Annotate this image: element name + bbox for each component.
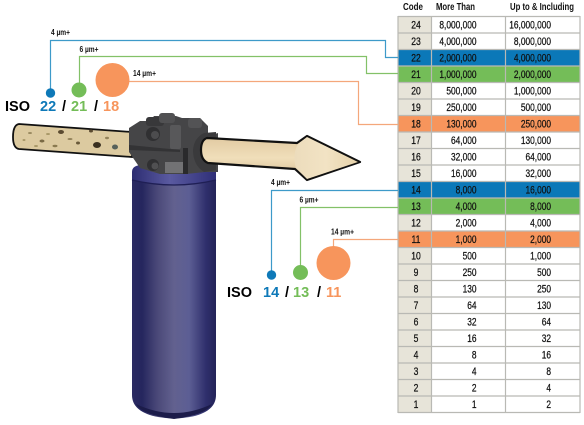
table values: 4: [546, 383, 551, 395]
label 14 micron: 14 µm+: [133, 69, 156, 78]
table values: 7: [414, 300, 418, 313]
4 micron dot: [267, 270, 276, 280]
table values: 130,000: [521, 135, 551, 148]
table values: [411, 20, 551, 412]
14 micron dot: [316, 246, 350, 280]
code column and highlighted rows: [398, 16, 580, 413]
ISO code 22/21/18: 21: [71, 99, 87, 115]
table values: 5: [414, 333, 419, 346]
table values: 21: [411, 69, 421, 82]
table values: 250: [537, 284, 551, 296]
table values: 8,000,000: [439, 20, 477, 32]
table values: 1,000,000: [439, 69, 477, 82]
4 micron dot: [46, 88, 55, 98]
ISO code 14/13/11: 13: [293, 285, 309, 301]
filter head: [129, 113, 218, 174]
table values: 18: [411, 119, 421, 131]
label 6 micron: 6 µm+: [300, 196, 319, 204]
ISO code 22/21/18: /: [94, 99, 98, 115]
label 6 micron: 6 µm+: [80, 45, 99, 54]
table values: 1: [414, 399, 418, 412]
filter canister: [132, 165, 216, 419]
table values: 12: [411, 218, 421, 230]
ISO code 14/13/11: ISO: [227, 285, 252, 301]
label 4 micron: 4 µm+: [271, 178, 290, 187]
table values: 16,000: [525, 185, 551, 197]
table values: 64,000: [451, 135, 477, 148]
table values: 1,000: [530, 251, 551, 263]
upper callout: ISO 22/21/18: [5, 28, 398, 124]
table values: 6: [414, 317, 419, 329]
6 micron dot: [72, 82, 86, 98]
table values: 250: [463, 267, 477, 280]
table values: 8,000: [456, 185, 477, 197]
table values: 130: [537, 300, 551, 313]
table values: 19: [411, 102, 421, 115]
4 micron connector: [272, 190, 398, 275]
4 micron connector: [50, 40, 398, 93]
ISO code 14/13/11: [227, 285, 341, 301]
table values: 16: [411, 152, 421, 164]
table values: 16: [542, 350, 551, 362]
table values: 2,000: [530, 234, 551, 247]
table values: 1,000,000: [514, 86, 551, 98]
table values: 32: [542, 333, 551, 346]
6 micron dot: [293, 265, 308, 280]
6 micron connector: [80, 56, 398, 84]
14 micron dot: [96, 63, 130, 97]
ISO code 14/13/11: 14: [263, 285, 279, 301]
contaminated inlet rod: [13, 124, 132, 157]
table values: 2,000,000: [439, 53, 477, 65]
14 micron connector: [129, 82, 398, 124]
ISO code 22/21/18: [5, 99, 119, 115]
table values: 22: [411, 53, 421, 65]
table values: 130,000: [446, 119, 477, 131]
table headers: Code: [403, 2, 423, 13]
table values: 10: [411, 251, 421, 263]
table values: 32: [467, 317, 476, 329]
table values: 8,000: [530, 201, 551, 214]
table values: 3: [414, 366, 419, 379]
table values: 8: [414, 284, 419, 296]
ISO code 22/21/18: 18: [103, 99, 119, 115]
table values: 16,000: [451, 168, 477, 181]
table values: 4: [472, 366, 477, 379]
6 micron connector: [300, 208, 398, 268]
table values: 20: [411, 86, 421, 98]
table values: 8: [472, 350, 476, 362]
table values: 2: [546, 399, 551, 412]
table values: 17: [411, 135, 421, 148]
table values: 13: [411, 201, 421, 214]
table headers: [403, 2, 574, 13]
ISO code 14/13/11: /: [317, 285, 321, 301]
table values: 1: [472, 399, 476, 412]
clean outlet arrow: [201, 136, 360, 180]
lower callout: ISO 14/13/11: [227, 178, 398, 301]
table values: 1,000: [456, 234, 477, 247]
table values: 130: [463, 284, 477, 296]
table values: 64,000: [525, 152, 551, 164]
table values: 8: [546, 366, 551, 379]
table values: 16: [467, 333, 476, 346]
table values: 4: [414, 350, 419, 362]
table values: 32,000: [451, 152, 477, 164]
table values: 64: [467, 300, 477, 313]
table values: 14: [411, 185, 421, 197]
table values: 2: [472, 383, 476, 395]
table values: 2,000,000: [514, 69, 551, 82]
table values: 11: [412, 234, 420, 247]
table: [398, 2, 580, 413]
table values: 250,000: [521, 119, 551, 131]
table values: 2: [414, 383, 418, 395]
ISO code 22/21/18: 22: [40, 99, 56, 115]
table values: 23: [411, 36, 421, 49]
table values: 4,000,000: [514, 53, 551, 65]
table grid: [398, 16, 580, 413]
table values: 64: [542, 317, 551, 329]
table values: 500,000: [446, 86, 477, 98]
ISO code 14/13/11: /: [285, 285, 289, 301]
table values: 9: [414, 267, 419, 280]
table values: 24: [411, 20, 421, 32]
ISO code 22/21/18: /: [62, 99, 66, 115]
table values: 2,000: [456, 218, 477, 230]
table values: 8,000,000: [514, 36, 551, 49]
ISO code 22/21/18: ISO: [5, 99, 30, 115]
table values: 250,000: [446, 102, 477, 115]
table values: 15: [411, 168, 421, 181]
table values: 16,000,000: [509, 20, 551, 32]
ISO code 14/13/11: 11: [326, 285, 341, 301]
table values: 500: [537, 267, 551, 280]
label 4 micron: 4 µm+: [51, 28, 70, 37]
label 14 micron: 14 µm+: [331, 228, 354, 236]
table values: 500,000: [521, 102, 551, 115]
table values: 500: [463, 251, 477, 263]
14 micron connector: [334, 240, 398, 247]
table headers: More Than: [436, 2, 475, 13]
table values: 4,000: [530, 218, 551, 230]
table values: 32,000: [525, 168, 551, 181]
table values: 4,000,000: [439, 36, 477, 49]
table values: 4,000: [456, 201, 477, 214]
filter housing: [13, 113, 360, 419]
